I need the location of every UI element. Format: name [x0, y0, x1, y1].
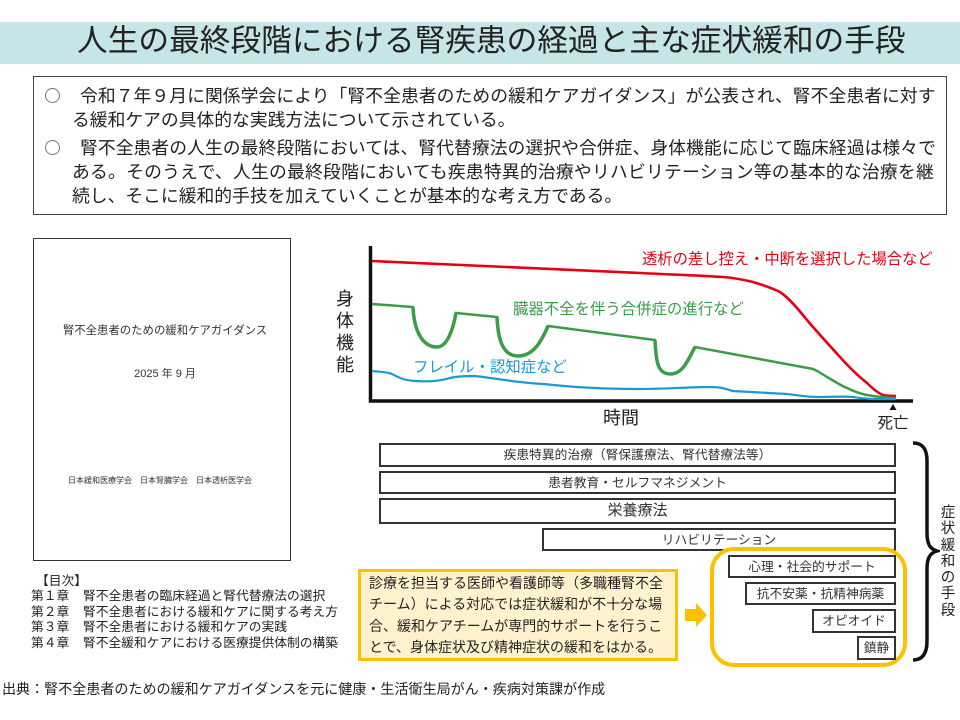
bar: nutrition therapy [379, 498, 896, 524]
cover societies: 日本緩和医療学会 日本腎臓学会 日本透析医学会 [68, 476, 252, 485]
y axis label: 機 [336, 333, 354, 353]
vertical label: symptom relief means: 段 [941, 603, 955, 619]
red curve label: 透析の差し控え・中断を選択した場合など [642, 251, 933, 268]
vertical label: symptom relief means: 症 [941, 505, 955, 521]
vertical label: symptom relief means: 和 [941, 554, 955, 570]
bar: anxiolytics and psychotropics [745, 582, 896, 605]
bar: sedation [857, 636, 896, 660]
brace: symptom relief means [913, 441, 940, 662]
table of contents: 第１章 [31, 588, 69, 603]
y axis label: 身 [336, 289, 354, 309]
bar: anxiolytics and psychotropics: 抗不安薬・抗精神病薬 [757, 586, 884, 600]
summary item 1 [45, 86, 936, 130]
bar: patient education [379, 471, 896, 494]
death marker [890, 404, 896, 410]
source note: 出典：腎不全患者のための緩和ケアガイダンスを元に健康・生活衛生局がん・疾病対策課が作成 [2, 681, 605, 697]
table of contents: 第３章 [31, 619, 69, 634]
axes [370, 246, 913, 401]
green curve label: 臓器不全を伴う合併症の進行など [513, 300, 744, 318]
red curve [372, 261, 896, 396]
table of contents: 第４章 [31, 635, 69, 650]
callout: palliative care team: 合、緩和ケアチームが専門的サポートを行うこ [369, 618, 662, 634]
callout: palliative care team [358, 569, 678, 661]
x axis label: 時間 [603, 408, 639, 428]
table of contents: 腎不全患者の臨床経過と腎代替療法の選択 [83, 588, 325, 603]
death label: 死亡 [877, 414, 909, 432]
vertical label: symptom relief means: 手 [941, 586, 955, 602]
table of contents: 腎不全患者における緩和ケアに関する考え方 [83, 604, 338, 619]
vertical label: symptom relief means: 緩 [941, 538, 955, 554]
vertical label: symptom relief means: 状 [941, 521, 955, 537]
bar: rehabilitation [542, 528, 896, 551]
bar: opioids [812, 609, 896, 633]
summary item 2: ある。そのうえで、人生の最終段階においても疾患特異的治療やリハビリテーション等の基本的な治療を継 [72, 162, 934, 182]
callout: palliative care team: チーム）による対応では症状緩和が不十分な場 [369, 596, 662, 612]
summary item 2 [45, 138, 936, 206]
summary item 1: る緩和ケアの具体的な実践方法について示されている。 [72, 110, 515, 130]
panel: guidance document cover [33, 238, 291, 561]
cover date: 2025 年 9 月 [134, 368, 196, 380]
arrow: to palliative means [685, 603, 707, 627]
y axis label: 体 [336, 311, 354, 331]
bar: nutrition therapy: 栄養療法 [607, 502, 668, 519]
chart: physical function over time [336, 246, 933, 432]
bar: rehabilitation: リハビリテーション [662, 532, 776, 546]
vertical label: symptom relief means: の [941, 570, 955, 586]
title band [0, 22, 960, 64]
y axis label: 能 [336, 355, 354, 375]
blue curve [372, 371, 896, 399]
green curve [372, 304, 896, 398]
bar: disease-specific treatment [379, 443, 896, 467]
bar: disease-specific treatment: 疾患特異的治療（腎保護療法、腎代替療法等） [504, 447, 771, 462]
vertical label: symptom relief means [941, 504, 955, 619]
bar: patient education: 患者教育・セルフマネジメント [548, 474, 727, 490]
table of contents: 腎不全緩和ケアにおける医療提供体制の構築 [83, 635, 338, 650]
table of contents [31, 573, 338, 650]
table of contents: 【目次】 [36, 573, 87, 588]
bar: psychosocial support [728, 555, 896, 578]
summary item 2: 続し、そこに緩和的手技を加えていくことが基本的な考え方である。 [72, 186, 622, 206]
table of contents: 腎不全患者における緩和ケアの実践 [83, 619, 287, 634]
blue curve label: フレイル・認知症など [413, 358, 567, 376]
bar: sedation: 鎮静 [864, 640, 889, 655]
bar: opioids: オピオイド [822, 613, 886, 628]
panel: summary text [33, 76, 947, 215]
highlight frame: palliative team [710, 547, 907, 667]
title: 人生の最終段階における腎疾患の経過と主な症状緩和の手段 [77, 23, 906, 58]
summary item 2: 腎不全患者の人生の最終段階においては、腎代替療法の選択や合併症、身体機能に応じて臨床経過は様々で [80, 138, 936, 158]
cover title: 腎不全患者のための緩和ケアガイダンス [63, 325, 267, 337]
callout: palliative care team: とで、身体症状及び精神症状の緩和をはかる。 [369, 639, 662, 655]
callout: palliative care team: 診療を担当する医師や看護師等（多職種腎不全 [369, 575, 663, 591]
table of contents: 第２章 [31, 604, 69, 619]
y axis label [336, 289, 354, 375]
green curve thick dips [413, 307, 695, 374]
bar: psychosocial support: 心理・社会的サポート [748, 558, 876, 574]
summary item 1: 令和７年９月に関係学会により「腎不全患者のための緩和ケアガイダンス」が公表され、腎不全患者に対す [80, 86, 936, 106]
